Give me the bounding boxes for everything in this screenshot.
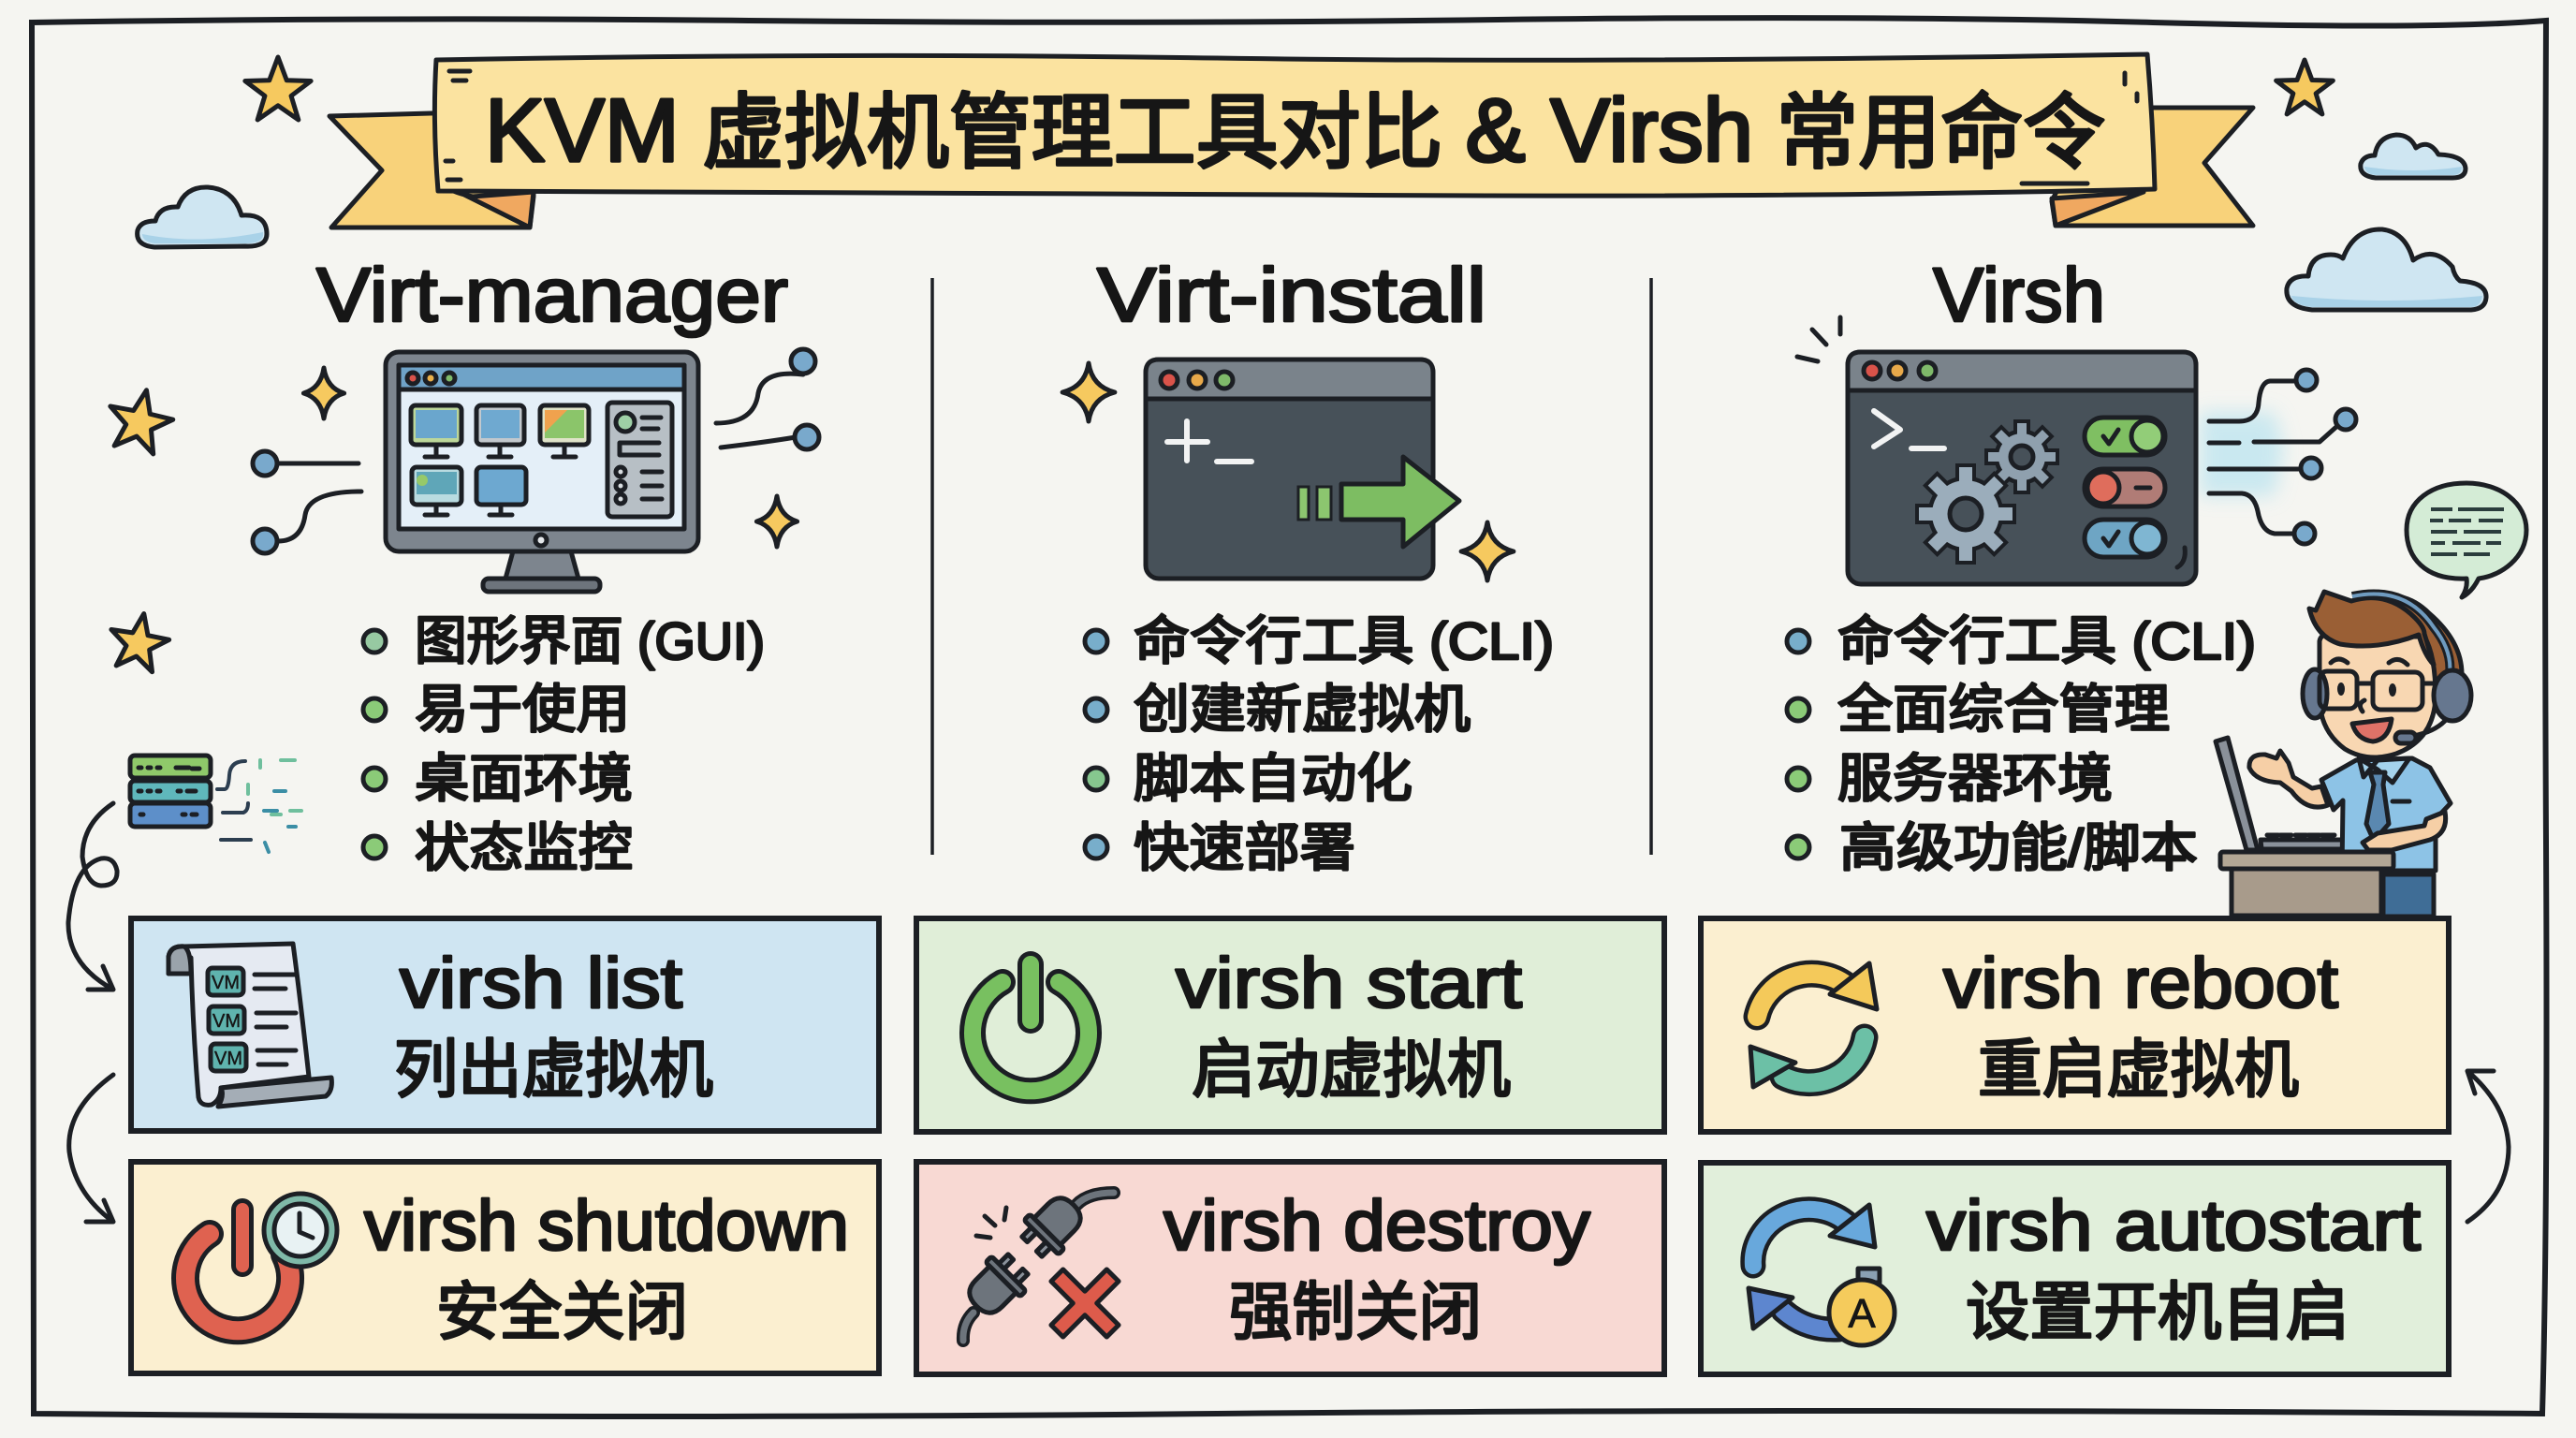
feature list: Virt-install: 命令行工具 (CLI) [1134, 611, 1554, 670]
command name: virsh autostart [1926, 1186, 2421, 1266]
face [2320, 633, 2436, 757]
icon: reboot arrows [1750, 963, 1877, 1087]
command name: virsh list [400, 944, 682, 1023]
icon: server stack [130, 756, 301, 852]
panel: Virt-install [1085, 253, 1554, 877]
feature list: Virt-install: 脚本自动化 [1134, 749, 1412, 808]
feature list: Virsh [1787, 611, 2256, 877]
feature list: Virsh: 命令行工具 (CLI) [1837, 611, 2256, 670]
command description: 设置开机自启 [1966, 1277, 2349, 1348]
command name: virsh destroy [1164, 1186, 1590, 1266]
column dividers [932, 278, 1651, 855]
mouth [2352, 719, 2392, 741]
command description: 安全关闭 [436, 1277, 688, 1348]
icon: autostart arrows with badge [1749, 1205, 1895, 1345]
decorative clouds [138, 135, 2486, 310]
icon: autostart arrows with badge: A [1848, 1291, 1876, 1337]
icon: red power button with clock [185, 1194, 337, 1330]
command card: virsh autostart [1701, 1163, 2449, 1374]
desk [2232, 869, 2381, 916]
icon: GUI monitor [253, 349, 819, 592]
heading: Virt-manager: Virt-manager [316, 253, 788, 338]
command card: virsh shutdown [131, 1162, 879, 1373]
command name: virsh reboot [1943, 944, 2338, 1023]
arrow: flow into virsh list [68, 803, 117, 990]
icon: Virsh terminal with gears and toggles [1797, 317, 2356, 584]
microphone [2413, 721, 2445, 736]
feature list: Virt-install [1085, 611, 1554, 877]
feature list: Virsh: 高级功能/脚本 [1839, 818, 2198, 877]
feature list: Virt-manager: 桌面环境 [415, 749, 633, 808]
feature list: Virt-manager: 易于使用 [415, 680, 630, 739]
heading: Virt-install: Virt-install [1097, 253, 1486, 338]
icon: VM list scroll [168, 944, 331, 1107]
icon: VM list scroll: VM [214, 1049, 242, 1069]
feature list: Virt-manager: 图形界面 (GUI) [415, 611, 765, 670]
icon: install terminal [1146, 360, 1459, 579]
command description: 重启虚拟机 [1978, 1034, 2299, 1106]
arrow: list to shutdown [69, 1075, 113, 1222]
headset [2352, 594, 2450, 674]
hair [2309, 592, 2434, 665]
command card: virsh start [916, 918, 1664, 1132]
command name: virsh shutdown [364, 1186, 849, 1266]
command card: virsh destroy [916, 1162, 1664, 1374]
feature list: Virt-manager [363, 611, 765, 877]
speech bubble [2407, 483, 2526, 597]
feature list: Virsh: 全面综合管理 [1837, 680, 2170, 739]
raised arm and hand [2249, 751, 2328, 807]
arrow: autostart to reboot [2467, 1071, 2509, 1222]
laptop [2216, 738, 2258, 850]
panel: Virsh [1787, 253, 2356, 877]
icon: VM list scroll: VM [212, 973, 240, 993]
icon: green power button [973, 964, 1089, 1091]
icon: VM list scroll: VM [212, 1011, 241, 1032]
headset band and back hair [2321, 595, 2462, 712]
feature list: Virt-install: 快速部署 [1134, 818, 1355, 877]
command description: 启动虚拟机 [1192, 1034, 1511, 1106]
command card: virsh list [131, 918, 879, 1131]
title text: KVM 虚拟机管理工具对比 & Virsh 常用命令 [485, 81, 2105, 181]
icon: unplugged cable with red cross [959, 1188, 1140, 1358]
presenter character with speech bubble [2216, 483, 2526, 917]
trousers [2383, 874, 2434, 917]
feature list: Virsh: 服务器环境 [1837, 749, 2113, 808]
feature list: Virt-manager: 状态监控 [415, 818, 633, 877]
feature list: Virt-install: 创建新虚拟机 [1134, 680, 1471, 739]
shirt [2321, 758, 2451, 871]
panel: Virt-manager [253, 253, 819, 877]
title banner [329, 54, 2253, 227]
heading: Virsh: Virsh [1933, 253, 2105, 338]
command card: virsh reboot [1701, 918, 2449, 1132]
working arm [2363, 812, 2446, 850]
glasses and eyes [2357, 682, 2434, 685]
command description: 强制关闭 [1229, 1277, 1482, 1348]
decorative stars and sparkles [102, 57, 2333, 674]
command description: 列出虚拟机 [394, 1034, 713, 1106]
command name: virsh start [1176, 944, 1522, 1023]
